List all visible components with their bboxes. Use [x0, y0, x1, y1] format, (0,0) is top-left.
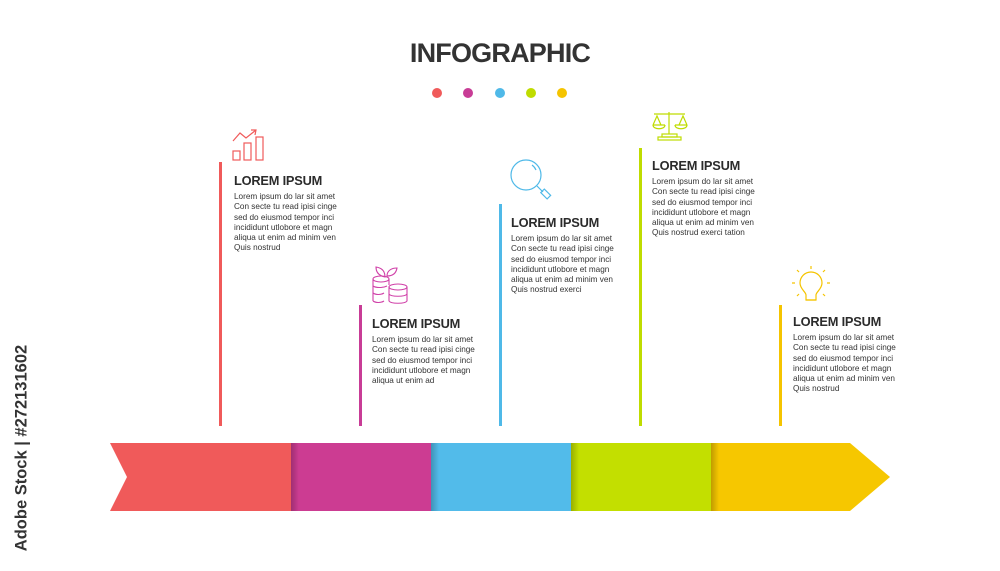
icon: light bulb [792, 266, 830, 301]
text block 3 [511, 215, 614, 294]
text block 5: Con secte tu read ipisi cinge [793, 343, 896, 352]
text block 1: sed do eiusmod tempor inci [234, 213, 334, 222]
text block 2: aliqua ut enim ad [372, 376, 434, 385]
color dots [432, 88, 567, 98]
text block 5: incididunt utlobore et magn [793, 364, 891, 373]
text block 3: sed do eiusmod tempor inci [511, 255, 611, 264]
text block 2: Con secte tu read ipisi cinge [372, 345, 475, 354]
text block 1: LOREM IPSUM [234, 173, 322, 188]
text block 3: LOREM IPSUM [511, 215, 599, 230]
text block 5: LOREM IPSUM [793, 314, 881, 329]
text block 2 [372, 316, 475, 385]
text block 5: Quis nostrud [793, 384, 839, 393]
vertical line 4 [639, 148, 642, 426]
text block 5 [793, 314, 896, 393]
text block 4: Lorem ipsum do lar sit amet [652, 177, 753, 186]
text block 4: Quis nostrud exerci tation [652, 228, 745, 237]
icon: coins sprout [372, 266, 408, 304]
icon: magnifier [510, 159, 552, 200]
title: INFOGRAPHIC [410, 38, 590, 68]
text block 1: Lorem ipsum do lar sit amet [234, 192, 335, 201]
text block 4 [652, 158, 755, 237]
text block 4: sed do eiusmod tempor inci [652, 198, 752, 207]
text block 5: aliqua ut enim ad minim ven [793, 374, 895, 383]
text block 2: sed do eiusmod tempor inci [372, 356, 472, 365]
text block 4: LOREM IPSUM [652, 158, 740, 173]
text block 4: aliqua ut enim ad minim ven [652, 218, 754, 227]
vertical line 2 [359, 305, 362, 426]
text block 1: Con secte tu read ipisi cinge [234, 202, 337, 211]
icon: bar chart [232, 129, 264, 161]
text block 4: Con secte tu read ipisi cinge [652, 187, 755, 196]
text block 1: Quis nostrud [234, 243, 280, 252]
text block 4: incididunt utlobore et magn [652, 208, 750, 217]
text block 2: incididunt utlobore et magn [372, 366, 470, 375]
text block 5: sed do eiusmod tempor inci [793, 354, 893, 363]
text block 3: Lorem ipsum do lar sit amet [511, 234, 612, 243]
text block 5: Lorem ipsum do lar sit amet [793, 333, 894, 342]
vertical line 5 [779, 305, 782, 426]
text block 3: aliqua ut enim ad minim ven [511, 275, 613, 284]
vertical line 1 [219, 162, 222, 426]
text block 3: Con secte tu read ipisi cinge [511, 244, 614, 253]
vertical line 3 [499, 204, 502, 426]
icon: scales [652, 112, 688, 141]
text block 3: Quis nostrud exerci [511, 285, 582, 294]
text block 1: aliqua ut enim ad minim ven [234, 233, 336, 242]
text block 3: incididunt utlobore et magn [511, 265, 609, 274]
text block 2: LOREM IPSUM [372, 316, 460, 331]
text block 1 [234, 173, 337, 252]
text block 2: Lorem ipsum do lar sit amet [372, 335, 473, 344]
text block 1: incididunt utlobore et magn [234, 223, 332, 232]
side label: Adobe Stock | #272131602 [12, 345, 30, 551]
